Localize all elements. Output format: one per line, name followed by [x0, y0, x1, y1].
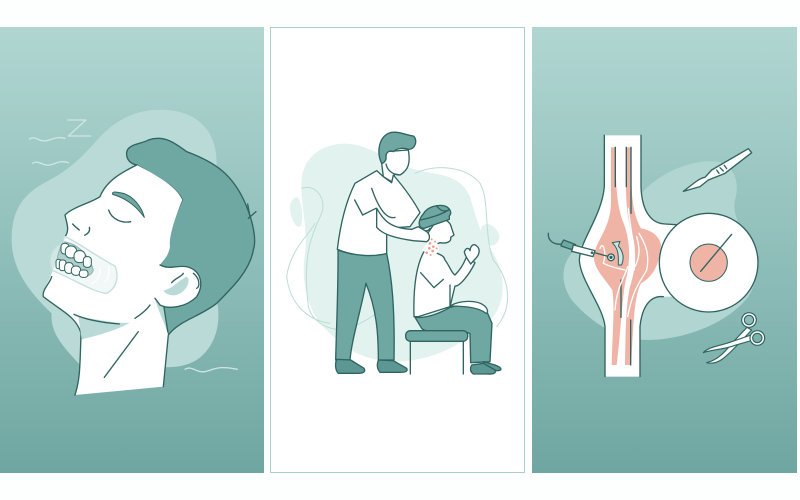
- panel: sleeping man with mouth guard: [0, 27, 264, 473]
- head wrap: [419, 205, 451, 228]
- background blob: [12, 110, 218, 367]
- mouth with teeth and guard: [50, 236, 117, 293]
- eyebrow and closed eye: [113, 192, 144, 217]
- background blob: [301, 144, 503, 362]
- hair: [379, 132, 416, 163]
- panel: joint surgery: [532, 27, 800, 473]
- nose: [73, 224, 90, 235]
- joint and white bone: [579, 135, 678, 377]
- panel: neck examination: [270, 28, 524, 472]
- arms and hand: [377, 208, 429, 242]
- patient raised hand: [464, 245, 479, 264]
- seated patient: [406, 219, 501, 374]
- patient trousers: [415, 305, 492, 363]
- shoes: [336, 359, 365, 373]
- patient shoes: [483, 362, 501, 371]
- icon: scissors: [703, 313, 765, 363]
- icon: snore Z and waves: [29, 120, 237, 372]
- pink tissues: [594, 147, 629, 365]
- stool: [410, 340, 463, 374]
- patient shirt: [414, 247, 475, 317]
- implant hook: [612, 241, 623, 265]
- ear detail: [163, 277, 189, 295]
- trousers: [336, 250, 394, 360]
- standing clinician: [336, 132, 429, 373]
- thin outline curves: [287, 168, 508, 329]
- patient head: [427, 219, 454, 244]
- syringe probe: [548, 233, 614, 261]
- shirt: [337, 171, 420, 256]
- neck shadow and lines: [78, 317, 130, 339]
- head and neck: [382, 150, 409, 182]
- hair: [127, 138, 255, 335]
- icon: scalpel: [683, 149, 752, 191]
- background blob: [563, 161, 757, 340]
- neck rash: [422, 235, 439, 255]
- head and neck: [43, 165, 201, 395]
- cross-section circle: [659, 213, 758, 312]
- white fibres: [600, 208, 648, 317]
